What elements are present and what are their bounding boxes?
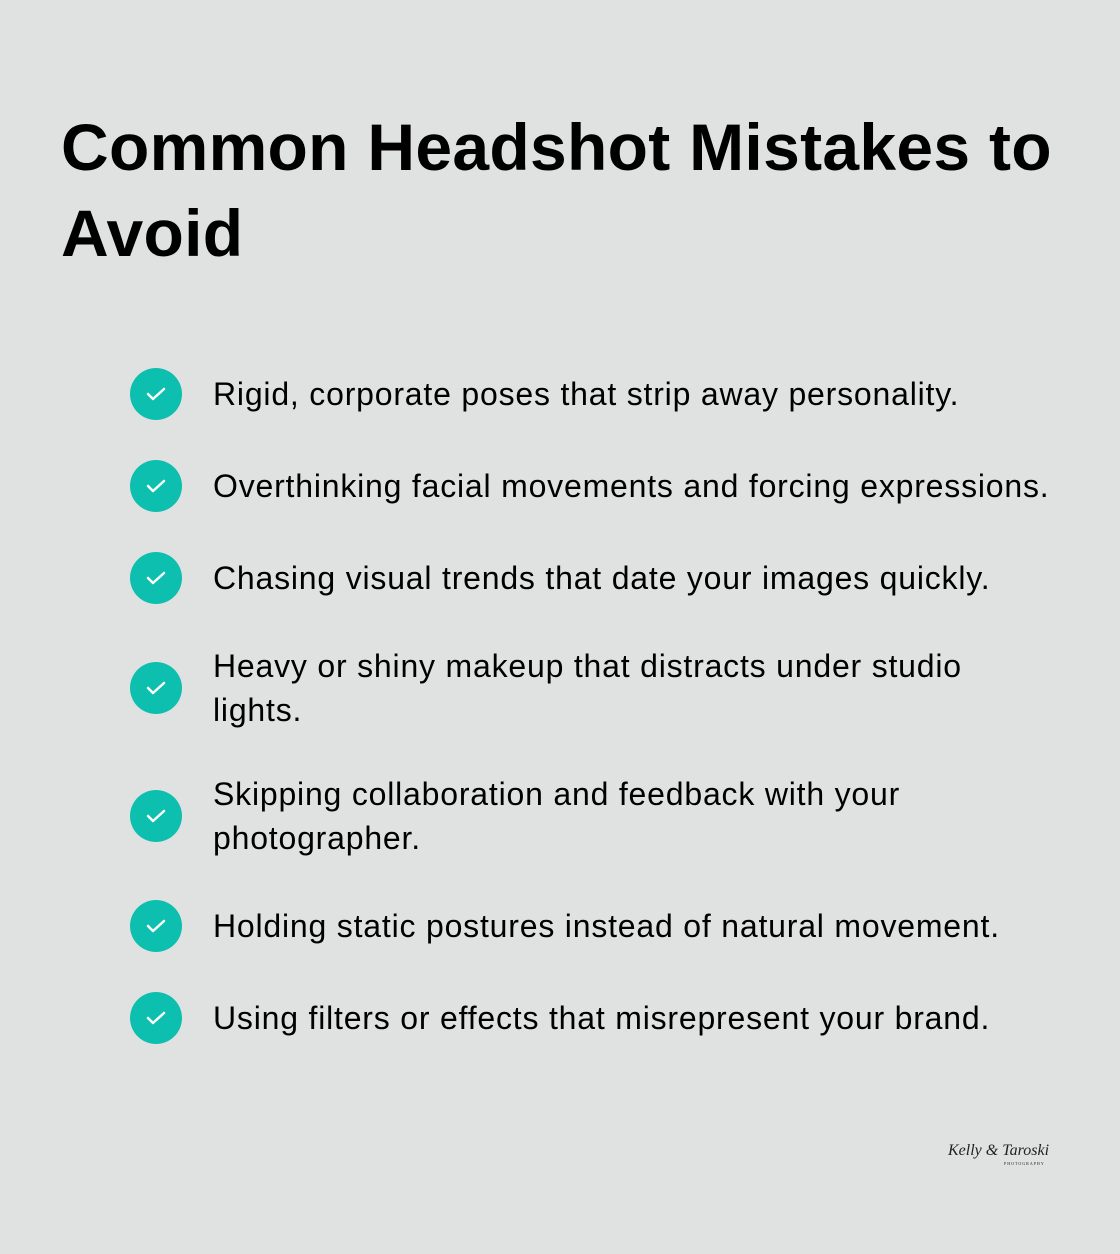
title: Common Headshot Mistakes to Avoid bbox=[61, 110, 1052, 270]
item 7: Using filters or effects that misrepresent your brand. bbox=[213, 1000, 990, 1036]
item 7 bbox=[130, 992, 990, 1044]
item 1: Rigid, corporate poses that strip away personality. bbox=[213, 376, 959, 412]
item 3 bbox=[130, 552, 990, 604]
item 6: Holding static postures instead of natural movement. bbox=[213, 908, 1000, 944]
item 2: Overthinking facial movements and forcing expressions. bbox=[213, 468, 1049, 504]
logo signature: PHOTOGRAPHY bbox=[1004, 1161, 1045, 1166]
item 6 bbox=[130, 900, 1000, 952]
item 1 bbox=[130, 368, 959, 420]
item 4: Heavy or shiny makeup that distracts under studio lights. bbox=[213, 648, 962, 728]
item 5: Skipping collaboration and feedback with your photographer. bbox=[213, 776, 900, 856]
logo signature: Kelly & Taroski bbox=[948, 1142, 1049, 1159]
item 3: Chasing visual trends that date your images quickly. bbox=[213, 560, 990, 596]
item 2 bbox=[130, 460, 1049, 512]
